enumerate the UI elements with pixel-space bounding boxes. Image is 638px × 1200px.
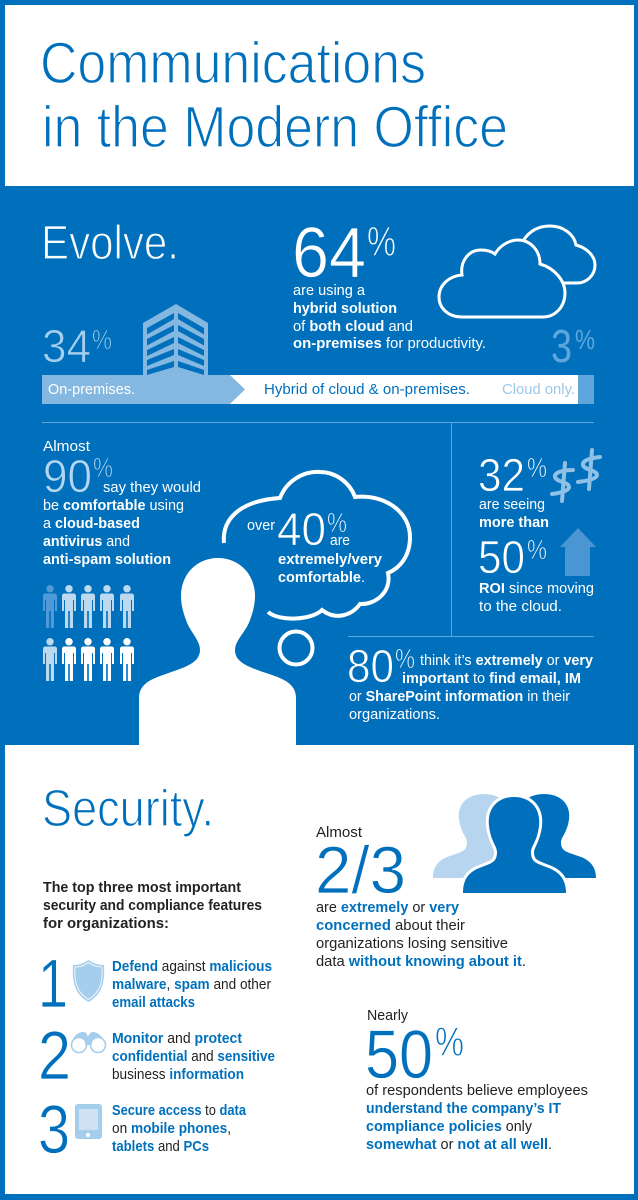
heading: security: Security. <box>42 780 214 838</box>
stat: two thirds concerned: Almost <box>316 824 363 841</box>
stat: 90 percent comfortable: % <box>93 452 113 483</box>
stat: 64 percent hybrid: 64 <box>292 214 366 293</box>
item 3: secure access: Secure access to data <box>112 1102 247 1119</box>
item 2: monitor: 2 <box>38 1017 71 1094</box>
stat: nearly 50 percent: 50 <box>365 1016 433 1093</box>
bar: on-premises hybrid cloud: On-premises. <box>48 381 135 398</box>
item 3: secure access: 3 <box>38 1091 70 1168</box>
stat: 3 percent: 3 <box>551 320 572 372</box>
stat: 3 percent: % <box>575 324 595 355</box>
stat: 34 percent: 34 <box>42 320 91 372</box>
item 1: defend <box>38 945 272 1022</box>
item 2: monitor: confidential and sensitive <box>112 1048 275 1065</box>
stat: 64 percent hybrid: on-premises for productivity. <box>293 335 486 352</box>
stat: nearly 50 percent: Nearly <box>367 1007 408 1024</box>
stat: 3 percent <box>551 320 595 372</box>
icon: shield <box>73 960 104 1002</box>
stat: over 40 percent: comfortable. <box>278 569 365 586</box>
pictogram: ten people <box>43 585 134 681</box>
panel: evolve <box>41 214 595 404</box>
stat: 64 percent hybrid: hybrid solution <box>293 300 397 317</box>
stat: two thirds concerned: data without knowing about it. <box>316 953 526 970</box>
stat: two thirds concerned: organizations losing sensitive <box>316 935 508 952</box>
icon: thought bubble <box>224 472 410 664</box>
stat: two thirds concerned: 2/3 <box>315 833 406 908</box>
item 2: monitor: Monitor and protect <box>112 1030 242 1047</box>
stat: 32 percent seeing more than 50 percent ROI: % <box>527 534 547 565</box>
stat: 34 percent: % <box>92 324 112 355</box>
item 2: monitor <box>38 1017 275 1094</box>
text: top three features intro: security and compliance features <box>43 897 262 914</box>
stat: 80 percent: or SharePoint information in their <box>349 688 570 705</box>
stat: over 40 percent: are <box>330 532 350 549</box>
item 1: defend: email attacks <box>112 994 195 1011</box>
item 3: secure access: on mobile phones, <box>112 1120 231 1137</box>
title <box>40 31 508 160</box>
item 1: defend: 1 <box>38 945 68 1022</box>
heading: evolve: Evolve. <box>41 217 179 270</box>
stat: 32 percent seeing more than 50 percent ROI: more than <box>479 514 549 531</box>
stat: 64 percent hybrid: of both cloud and <box>293 318 413 335</box>
bar: on-premises hybrid cloud: Cloud only. <box>502 381 575 398</box>
stat: 32 percent seeing more than 50 percent ROI: ROI since moving <box>479 580 594 597</box>
stat: 32 percent seeing more than 50 percent ROI: are seeing <box>479 496 545 513</box>
stat: 80 percent: important to find email, IM <box>402 670 581 687</box>
bar: on-premises hybrid cloud: Hybrid of cloud & on-premises. <box>264 381 470 398</box>
stat: over 40 percent: % <box>327 507 347 538</box>
icon: three people <box>433 794 596 893</box>
item 1: defend: Defend against malicious <box>112 958 272 975</box>
text: top three features intro <box>43 879 262 932</box>
icon: person silhouette <box>139 558 296 748</box>
icon: up arrow <box>560 528 596 576</box>
icon: building <box>143 304 208 375</box>
stat: 90 percent comfortable <box>43 438 201 568</box>
title: Communications <box>40 31 426 96</box>
stat: 32 percent seeing more than 50 percent ROI: to the cloud. <box>479 598 562 615</box>
bar: on-premises hybrid cloud <box>42 375 594 404</box>
item 2: monitor: business information <box>112 1066 244 1083</box>
stat: nearly 50 percent: understand the company’s IT <box>366 1100 561 1117</box>
stat: 90 percent comfortable: be comfortable using <box>43 497 184 514</box>
stat: 80 percent: 80 <box>347 640 394 692</box>
icon: tablet <box>75 1104 102 1139</box>
item 1: defend: malware, spam and other <box>112 976 271 993</box>
stat: 90 percent comfortable: 90 <box>43 450 92 502</box>
text: top three features intro: for organizations: <box>43 915 169 932</box>
stat: 80 percent: % <box>395 643 415 674</box>
stat: two thirds concerned: are extremely or very <box>316 899 460 916</box>
stat: nearly 50 percent: of respondents believe employees <box>366 1082 588 1099</box>
stat: nearly 50 percent: somewhat or not at all well. <box>366 1136 552 1153</box>
panel: security <box>5 745 634 1194</box>
icon: binoculars <box>71 1032 106 1052</box>
stat: 32 percent seeing more than 50 percent ROI <box>478 449 594 615</box>
item 3: secure access: tablets and PCs <box>112 1138 209 1155</box>
item 3: secure access <box>38 1091 247 1168</box>
stat: nearly 50 percent <box>365 1007 588 1153</box>
stat: 90 percent comfortable: antivirus and <box>43 533 130 550</box>
text: top three features intro: The top three most important <box>43 879 241 896</box>
stat: 90 percent comfortable: say they would <box>103 479 201 496</box>
stat: nearly 50 percent: % <box>435 1019 464 1065</box>
stat: 32 percent seeing more than 50 percent ROI: 50 <box>478 531 525 583</box>
stat: nearly 50 percent: compliance policies only <box>366 1118 532 1135</box>
stat: 32 percent seeing more than 50 percent ROI: 32 <box>478 449 525 501</box>
icon: clouds <box>439 226 595 317</box>
stat: 90 percent comfortable: a cloud-based <box>43 515 140 532</box>
stat: 80 percent: think it’s extremely or very <box>420 652 594 669</box>
stat: 64 percent hybrid: are using a <box>293 282 366 299</box>
title: in the Modern Office <box>42 95 508 160</box>
stat: over 40 percent <box>247 503 383 586</box>
stat: over 40 percent: over <box>247 517 275 534</box>
stat: 32 percent seeing more than 50 percent ROI: % <box>527 452 547 483</box>
stat: 80 percent: organizations. <box>349 706 440 723</box>
stat: 90 percent comfortable: Almost <box>43 438 91 455</box>
stat: two thirds concerned: concerned about their <box>316 917 465 934</box>
stat: two thirds concerned <box>315 824 526 970</box>
icon: dollar signs <box>552 450 600 501</box>
stat: 80 percent <box>347 640 594 723</box>
stat: 64 percent hybrid: % <box>367 218 396 265</box>
stat: over 40 percent: 40 <box>277 503 326 555</box>
panel: title <box>5 5 634 186</box>
stat: 90 percent comfortable: anti-spam solution <box>43 551 171 568</box>
stat: over 40 percent: extremely/very <box>278 551 383 568</box>
stat: 64 percent hybrid <box>292 214 486 352</box>
